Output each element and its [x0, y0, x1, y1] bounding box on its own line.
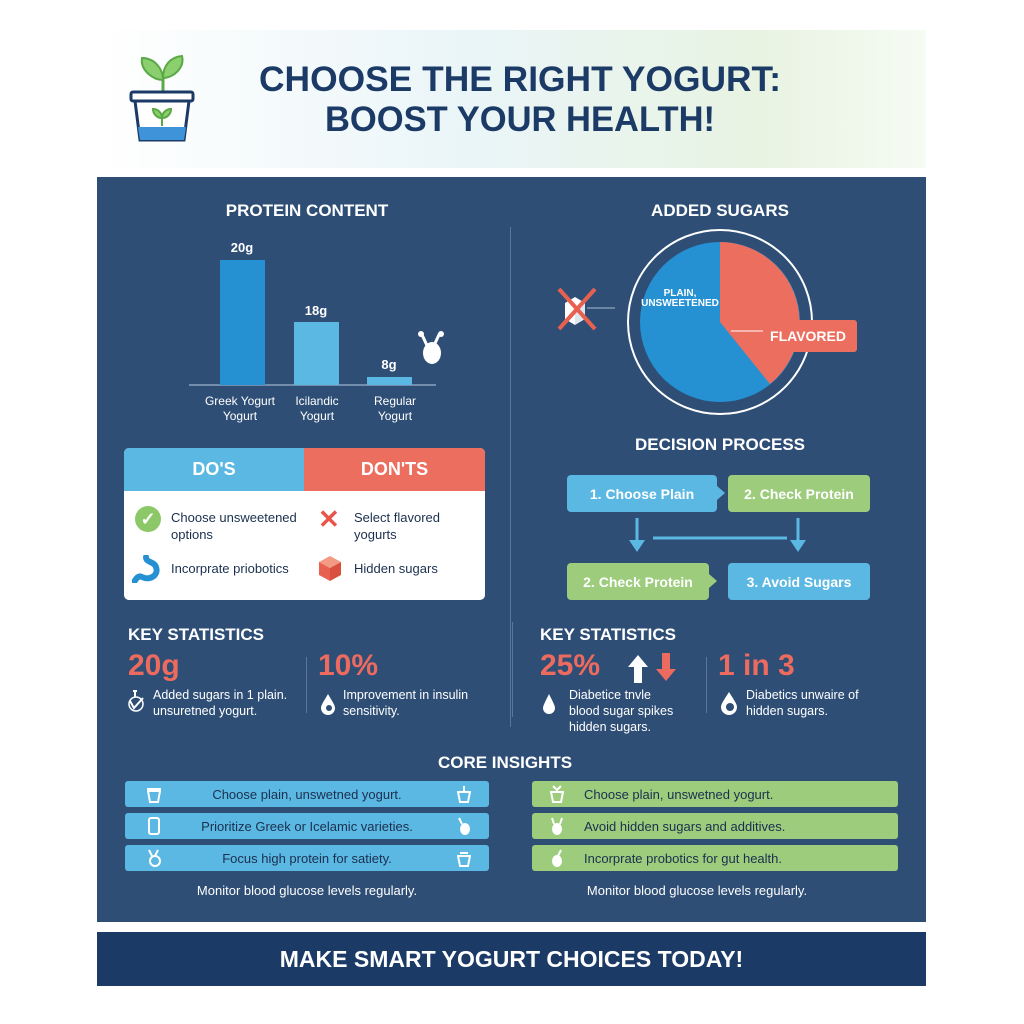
text: dont 1: [354, 510, 440, 542]
text: do 1: [171, 510, 297, 542]
flowchart: decision process: 2. Check Protein: [583, 574, 693, 590]
key statistics right: [540, 625, 859, 734]
main panel: [97, 177, 926, 922]
header: do's: [124, 448, 304, 491]
text: dont 2: Hidden sugars: [354, 561, 438, 576]
bar chart: protein: 8g: [381, 357, 397, 372]
stat: 10%: 10%: [318, 649, 378, 682]
heading: added sugars: ADDED SUGARS: [651, 201, 789, 220]
pie chart: added sugars: UNSWEETENED: [641, 298, 719, 309]
pie chart: added sugars: [558, 229, 857, 415]
insights right: [532, 781, 898, 898]
title: BOOST YOUR HEALTH!: [325, 100, 715, 139]
footer banner: MAKE SMART YOGURT CHOICES TODAY!: [280, 946, 743, 972]
stat: 20g: 20g: [128, 649, 180, 682]
bar chart: protein: Yogurt: [378, 409, 413, 423]
text: do 1: Choose unsweetened: [171, 510, 297, 525]
insights right: Incorprate probotics for gut health.: [584, 850, 782, 866]
pie chart: added sugars: PLAIN,: [664, 288, 697, 299]
bar chart: protein: Regular: [374, 394, 416, 408]
insights right: Avoid hidden sugars and additives.: [584, 818, 785, 834]
key statistics right: KEY STATISTICS: [540, 625, 676, 644]
text: dont 1: Select flavored: [354, 510, 440, 525]
stat: 10%: [318, 649, 468, 718]
icon: check: ✓: [140, 509, 156, 529]
bar chart: protein: [189, 240, 444, 423]
heading: core insights: CORE INSIGHTS: [438, 753, 572, 772]
flowchart: decision process: 2. Check Protein: [744, 486, 854, 502]
stat: 1 in 3: [718, 649, 859, 718]
icon: check: [135, 506, 161, 532]
stat: 20g: [128, 649, 287, 718]
stat: 25%: Diabetice tnvle: [569, 688, 651, 702]
bar chart: protein: Yogurt: [300, 409, 335, 423]
header: do's: DO'S: [192, 459, 236, 479]
bar chart: protein: Yogurt: [223, 409, 258, 423]
icon: stomach: [132, 555, 160, 583]
stat: 1 in 3: 1 in 3: [718, 649, 795, 682]
title: [259, 60, 781, 139]
footer banner: [97, 932, 926, 986]
insights right: Choose plain, unswetned yogurt.: [584, 786, 773, 802]
insights left: Choose plain, unswetned yogurt.: [212, 786, 402, 802]
insights left: Monitor blood glucose levels regularly.: [197, 883, 417, 898]
title: CHOOSE THE RIGHT YOGURT:: [259, 60, 781, 99]
bar chart: protein: Greek Yogurt: [205, 394, 276, 408]
text: dont 1: yogurts: [354, 527, 397, 542]
stat: 25%: hidden sugars.: [569, 720, 651, 734]
flowchart: decision process: [567, 475, 870, 600]
header: don'ts: [304, 448, 485, 491]
icon: cube: [319, 556, 341, 581]
key statistics left: [128, 625, 468, 718]
flowchart: decision process: 3. Avoid Sugars: [747, 574, 851, 590]
bar chart: protein: 18g: [305, 303, 327, 318]
insights left: Focus high protein for satiety.: [222, 850, 392, 866]
heading: protein content: PROTEIN CONTENT: [226, 201, 388, 220]
pie chart: added sugars: FLAVORED: [770, 328, 846, 344]
stat: 25%: [540, 649, 676, 734]
key statistics left: KEY STATISTICS: [128, 625, 264, 644]
stat: 1 in 3: hidden sugars.: [746, 704, 828, 718]
stat: 10%: sensitivity.: [343, 704, 400, 718]
stat: 20g: unsuretned yogurt.: [153, 704, 257, 718]
icon: red x: ✕: [318, 504, 340, 534]
header background: [97, 30, 926, 168]
text: do 1: options: [171, 527, 213, 542]
text: do 2: Incorprate priobotics: [171, 561, 289, 576]
stat: 1 in 3: Diabetics unwaire of: [746, 688, 859, 702]
stat: 10%: Improvement in insulin: [343, 688, 468, 702]
insights left: Prioritize Greek or Icelamic varieties.: [201, 818, 413, 834]
bar chart: protein: 20g: [231, 240, 253, 255]
insights right: Monitor blood glucose levels regularly.: [587, 883, 807, 898]
bar chart: protein: Icilandic: [295, 394, 339, 408]
stat: 20g: Added sugars in 1 plain.: [153, 688, 287, 702]
flowchart: decision process: 1. Choose Plain: [590, 486, 694, 502]
stat: 25%: 25%: [540, 649, 600, 682]
header: don'ts: DON'TS: [361, 459, 428, 479]
insights left: [125, 781, 489, 898]
stat: 25%: blood sugar spikes: [569, 704, 673, 718]
icon: yogurt cup with sprout: [130, 54, 194, 142]
heading: decision process: DECISION PROCESS: [635, 435, 805, 454]
panel: do's and don'ts: [124, 448, 485, 600]
divider: [512, 622, 513, 717]
